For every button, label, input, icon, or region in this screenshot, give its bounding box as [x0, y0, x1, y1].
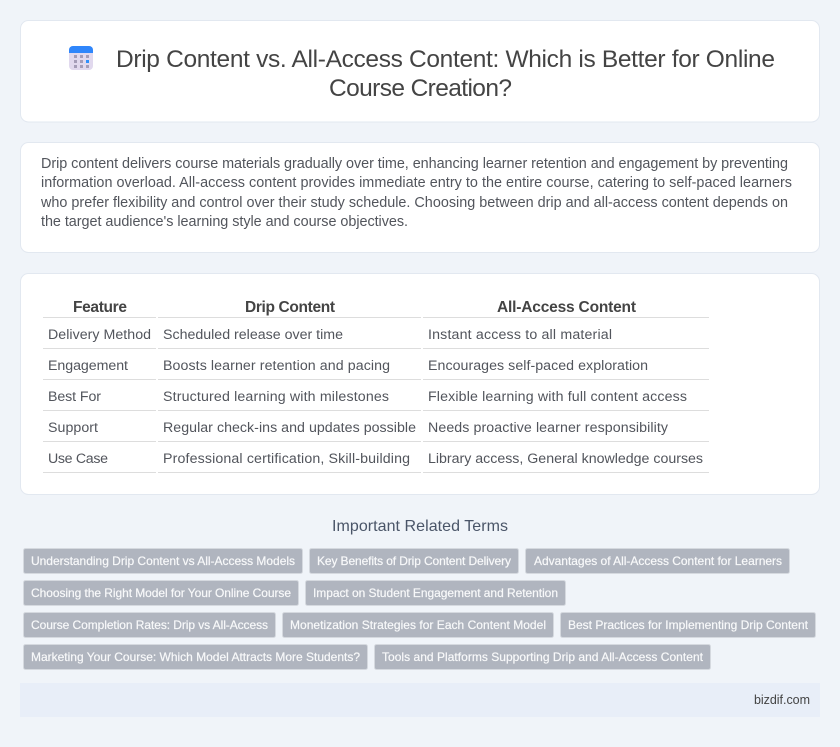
table row: use case [48, 451, 703, 467]
table header row: All-Access Content [497, 299, 636, 316]
tag: Tools and Platforms Supporting Drip and All-Access Content [382, 650, 704, 664]
table row: best for: Best For [48, 389, 101, 405]
tag: Understanding Drip Content vs All-Access Models [31, 554, 295, 568]
tag: Choosing the Right Model for Your Online Course [31, 586, 291, 600]
table row: use case: Library access, General knowledge courses [428, 451, 703, 467]
table row: support [48, 420, 669, 436]
table header row: Feature [73, 299, 127, 316]
tag: Key Benefits of Drip Content Delivery [317, 554, 511, 568]
title: Drip Content vs. All-Access Content: Which is Better for Online [116, 46, 775, 73]
title [116, 46, 775, 102]
table row: best for: Structured learning with milestones [163, 389, 389, 405]
table row: use case: Use Case [48, 451, 108, 467]
panel: introduction text: who prefer flexibility and control over their study schedule. Choosing between drip and all-access content depends on [40, 195, 788, 211]
tag [560, 612, 816, 638]
table row: support: Needs proactive learner responsibility [428, 420, 669, 436]
table row: engagement: Encourages self-paced exploration [428, 358, 648, 374]
table row: delivery method [48, 327, 612, 343]
table header row [73, 299, 636, 316]
table row: engagement: Engagement [48, 358, 128, 374]
tag: Advantages of All-Access Content for Learners [534, 554, 782, 568]
table row: best for: Flexible learning with full content access [428, 389, 687, 405]
table row: delivery method: Scheduled release over time [163, 327, 343, 343]
panel: introduction text: Drip content delivers course materials gradually over time, enhancing learner retention and engagement by preventing [41, 156, 788, 172]
icon: calendar [69, 46, 93, 70]
related terms tags [24, 548, 816, 670]
tag [24, 580, 298, 606]
title: Course Creation? [329, 75, 512, 102]
tag: Course Completion Rates: Drip vs All-Access [31, 618, 268, 632]
tag [24, 644, 368, 670]
tag [306, 580, 566, 606]
heading: important related terms: Important Related Terms [332, 518, 508, 535]
tag [24, 612, 276, 638]
table row: support: Support [48, 420, 98, 436]
tag [24, 548, 302, 574]
panel: comparison table [20, 274, 820, 494]
table row: delivery method: Instant access to all material [428, 327, 612, 343]
table row: engagement: Boosts learner retention and pacing [163, 358, 390, 374]
tag: Monetization Strategies for Each Content Model [290, 618, 546, 632]
panel: title header [20, 20, 820, 122]
footer [20, 683, 820, 717]
panel: introduction text [20, 142, 820, 252]
tag [526, 548, 790, 574]
tag [282, 612, 554, 638]
panel: introduction text: information overload. All-access content provides immediate entry to the entire course, catering to self-paced learners [41, 175, 792, 191]
footer: bizdif.com [754, 693, 810, 707]
table header row: Drip Content [245, 299, 335, 316]
tag [310, 548, 518, 574]
table row: delivery method: Delivery Method [48, 327, 151, 343]
tag: Marketing Your Course: Which Model Attracts More Students? [31, 650, 360, 664]
table row: use case: Professional certification, Skill-building [163, 451, 410, 467]
tag [374, 644, 710, 670]
table row: best for [48, 389, 687, 405]
panel: introduction text: the target audience's learning style and course objectives. [41, 214, 408, 230]
table row: engagement [48, 358, 648, 374]
tag: Best Practices for Implementing Drip Content [568, 618, 809, 632]
tag: Impact on Student Engagement and Retention [313, 586, 558, 600]
table row: support: Regular check-ins and updates possible [163, 420, 416, 436]
